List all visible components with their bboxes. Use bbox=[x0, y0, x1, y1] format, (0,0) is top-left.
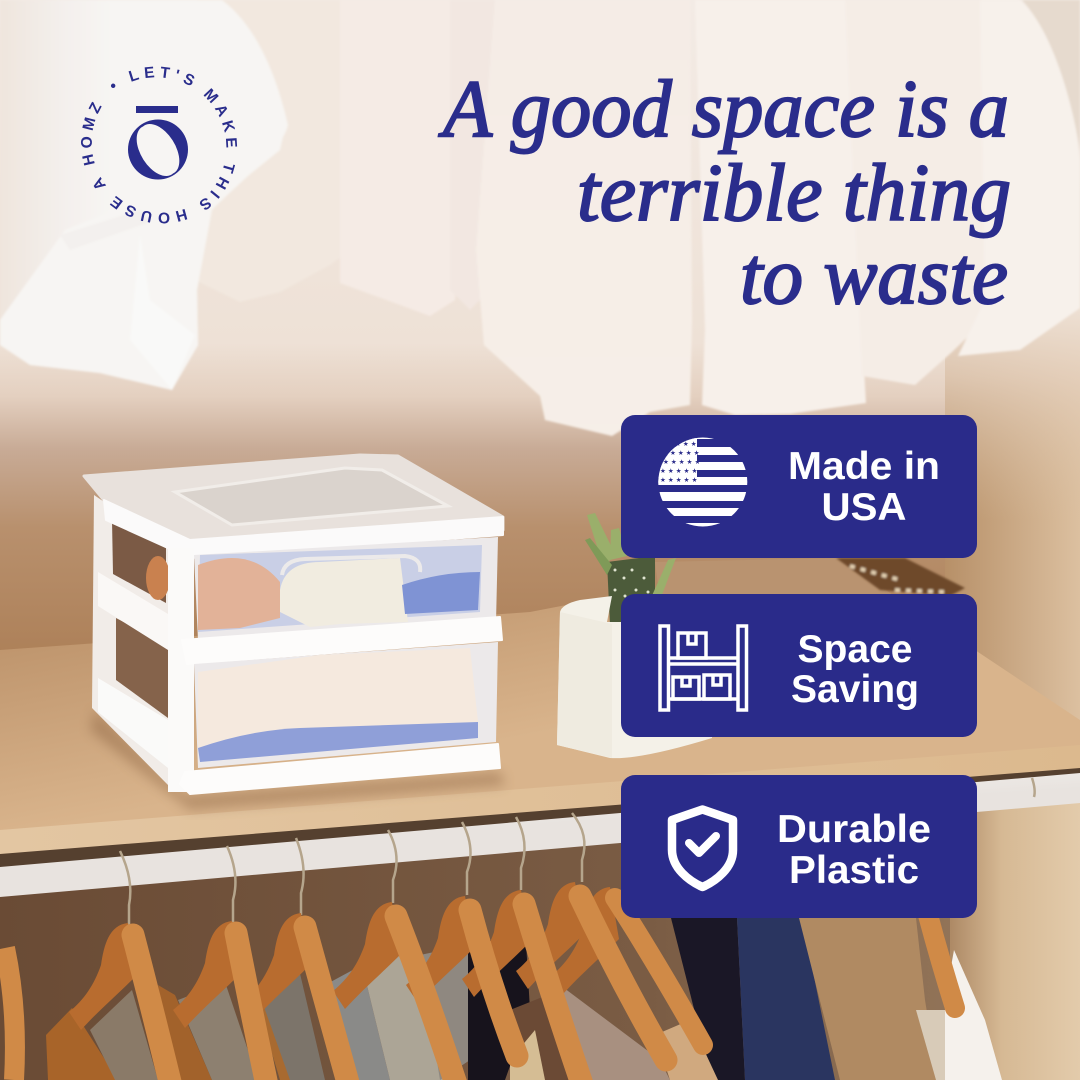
top drawer bbox=[194, 537, 498, 640]
under-shelf shadow strip bbox=[0, 765, 1080, 872]
pot bbox=[557, 596, 712, 758]
badge: made in USA bbox=[621, 415, 977, 558]
lower closet back wall bbox=[0, 800, 1080, 1080]
hat on shelf bbox=[655, 558, 900, 600]
icon: US flag circle: ★ ★ ★ ★ ★ bbox=[660, 476, 698, 484]
headline bbox=[438, 63, 1011, 321]
badge: durable plastic: Plastic bbox=[789, 849, 919, 892]
icon: US flag circle: ★ ★ ★ ★ bbox=[670, 449, 700, 457]
plant in white pot bbox=[557, 513, 712, 758]
shelf top surface bbox=[0, 560, 1080, 832]
label: Space bbox=[798, 628, 912, 671]
logo badge bbox=[80, 66, 238, 224]
right side panel bbox=[945, 300, 1080, 722]
badge: space saving bbox=[621, 594, 977, 737]
clothes rail bbox=[0, 773, 1080, 897]
icon: shelf with boxes bbox=[660, 626, 746, 710]
headline: to waste bbox=[740, 230, 1008, 321]
icon: shield check bbox=[672, 810, 733, 887]
icon: US flag circle bbox=[658, 438, 748, 526]
label: Made in bbox=[788, 445, 940, 488]
icon: US flag circle: ★ ★ ★ bbox=[675, 440, 697, 448]
cactus bbox=[585, 513, 676, 625]
headline: terrible thing bbox=[577, 147, 1011, 238]
side frame bbox=[92, 495, 178, 792]
macron bar bbox=[136, 106, 178, 113]
left shirt bbox=[0, 0, 288, 390]
white clothes hanging at the top bbox=[0, 0, 1080, 436]
badge: durable plastic bbox=[621, 775, 977, 918]
wooden hangers bbox=[5, 778, 1035, 1080]
hanging garments bbox=[46, 918, 1002, 1080]
shelf front edge bbox=[0, 745, 1080, 854]
icon: US flag circle: ★ ★ ★ ★ ★ bbox=[660, 467, 698, 475]
badge: made in USA: USA bbox=[822, 486, 906, 529]
shadow bbox=[90, 710, 505, 810]
sunglasses on shelf bbox=[836, 558, 965, 596]
front frame bbox=[168, 548, 194, 792]
icon: US flag circle: ★ ★ ★ ★ ★ bbox=[663, 458, 701, 466]
lower right side panel bbox=[950, 795, 1080, 1080]
plastic drawer unit bbox=[84, 455, 505, 810]
headline: A good space is a bbox=[438, 63, 1009, 154]
badge: space saving: Saving bbox=[791, 668, 919, 711]
circular tagline: • LET'S MAKE THIS HOUSE A HOMZ bbox=[80, 66, 238, 224]
top lid bbox=[84, 455, 503, 555]
bottom drawer bbox=[194, 642, 498, 768]
label: Durable bbox=[777, 808, 931, 851]
o mark bbox=[128, 120, 188, 180]
